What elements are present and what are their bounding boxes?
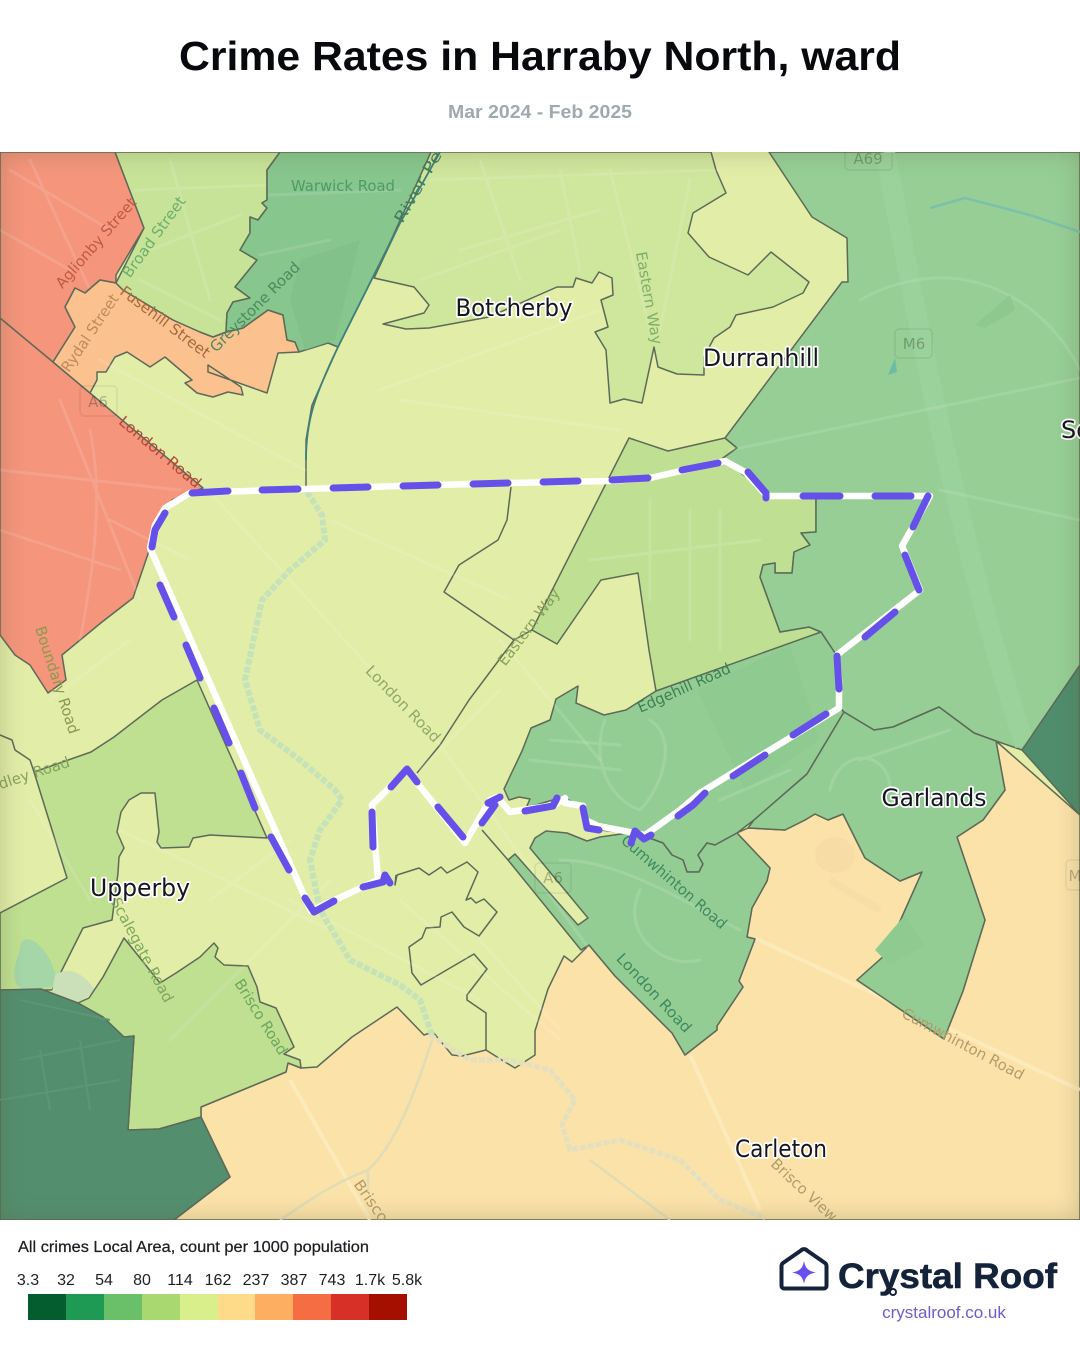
road name labels: Cumwhinton Road xyxy=(618,831,730,933)
road name labels: Eastern Way xyxy=(494,585,564,669)
road name labels: River Pe xyxy=(390,152,446,226)
road name labels: London Road xyxy=(362,662,444,746)
road name labels: Fusehill Street xyxy=(116,282,214,362)
place name labels: Durranhill xyxy=(703,344,819,372)
legend tick labels: 80 xyxy=(133,1272,151,1289)
area: large green east of M6 xyxy=(723,152,1080,750)
area: dark green south-west xyxy=(0,989,230,1220)
road name labels: Scalegate Road xyxy=(107,895,177,1005)
legend tick labels: 5.8k xyxy=(392,1272,422,1289)
legend tick labels: 743 xyxy=(319,1272,345,1289)
legend tick labels: 54 xyxy=(95,1272,113,1289)
river Petteril beige section xyxy=(430,1035,765,1218)
road name labels: Aglionby Street xyxy=(52,194,140,292)
wordmark: Crystal Roof xyxy=(838,1257,1057,1296)
road shields: A6 xyxy=(88,393,108,411)
road name labels: London Road xyxy=(613,950,695,1036)
logo: Crystal Roof xyxy=(780,1247,1058,1296)
road name labels: Edgehill Road xyxy=(635,659,733,717)
road name labels: London Road xyxy=(115,412,205,492)
area: green Edgehill Road neighbourhood xyxy=(504,632,844,872)
area: light green south-west of ward xyxy=(0,680,267,990)
website link: crystalroof.co.uk xyxy=(882,1303,1006,1322)
road name labels xyxy=(0,148,1027,1226)
road name labels: Warwick Road xyxy=(291,177,395,195)
area: light green Broad Street xyxy=(115,152,280,337)
title: Crime Rates in Harraby North, ward xyxy=(179,33,901,79)
road name labels: Cumwhinton Road xyxy=(899,1004,1027,1084)
road name labels: Boundary Road xyxy=(31,624,83,736)
roads inside ward xyxy=(30,310,620,1040)
place name labels: Upperby xyxy=(90,874,190,902)
area: light green Upperby south xyxy=(78,938,301,1130)
road name labels: Brisco Road xyxy=(231,976,291,1058)
legend title: All crimes Local Area, count per 1000 population xyxy=(18,1239,369,1256)
legend tick labels: 162 xyxy=(205,1272,231,1289)
area: high crime red city centre xyxy=(0,152,203,693)
legend tick labels: 114 xyxy=(167,1272,193,1289)
legend tick labels: 237 xyxy=(243,1272,269,1289)
place name labels xyxy=(90,294,1080,1163)
ward boundary: Harraby North xyxy=(150,461,930,912)
choropleth map panel xyxy=(0,152,1080,1220)
road shields: M6 xyxy=(903,335,925,353)
road name labels: Broad Street xyxy=(119,193,190,281)
area: green Garlands xyxy=(748,707,1005,1039)
road shields xyxy=(80,148,1080,893)
area: beige Carleton south xyxy=(174,741,1080,1220)
place name labels: Garlands xyxy=(882,784,986,812)
road name labels: Rydal Street xyxy=(57,291,123,375)
road name labels: Eastern Way xyxy=(632,250,666,346)
place name labels: Carleton xyxy=(735,1135,827,1163)
legend tick labels xyxy=(17,1272,422,1289)
river channel north xyxy=(306,152,440,460)
legend tick labels: 32 xyxy=(57,1272,75,1289)
legend tick labels: 1.7k xyxy=(355,1272,385,1289)
area: light green centre-east of ward xyxy=(532,438,821,691)
area: light green Botcherby xyxy=(374,152,809,403)
legend tick labels: 387 xyxy=(281,1272,307,1289)
area: green south London Road xyxy=(508,831,770,1055)
river Petteril xyxy=(245,492,432,1035)
place name labels: Botcherby xyxy=(456,294,572,322)
area: pond near Upperby xyxy=(14,939,112,1018)
legend tick labels: 3.3 xyxy=(17,1272,39,1289)
subtitle: date range: Mar 2024 - Feb 2025 xyxy=(448,102,632,122)
area: green Warwick Road xyxy=(226,152,440,352)
area: dark green far east xyxy=(1022,665,1080,815)
road shields: A6 xyxy=(543,869,563,887)
area: orange Fusehill xyxy=(53,280,299,397)
icon: house with star xyxy=(782,1249,826,1288)
ward internal boundaries xyxy=(306,223,532,1050)
legend colour scale xyxy=(28,1294,407,1320)
road name labels: Greystone Road xyxy=(206,258,304,356)
